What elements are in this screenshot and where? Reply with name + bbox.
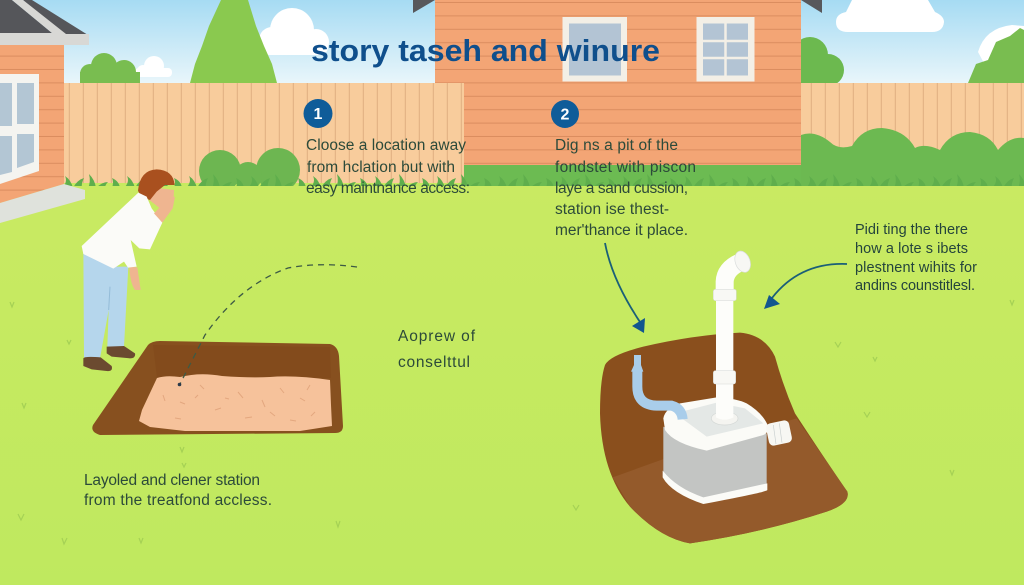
house wall bbox=[435, 0, 801, 166]
window: right bbox=[696, 17, 754, 82]
face bbox=[147, 187, 174, 208]
sand bbox=[139, 374, 332, 431]
pit back wall shading bbox=[153, 345, 331, 378]
side note text: andins counstitlesl. bbox=[855, 278, 975, 294]
pit caption text: from the treatfond accless. bbox=[84, 492, 272, 509]
pit: left with sand bbox=[92, 341, 343, 435]
step 1 text: easy maintnance access: bbox=[306, 180, 470, 197]
step 2 badge: 2 bbox=[561, 106, 570, 124]
person bbox=[82, 169, 175, 371]
center note text bbox=[398, 328, 476, 371]
hand at side bbox=[129, 267, 141, 290]
step 1 badge bbox=[304, 99, 332, 128]
foundation bbox=[0, 184, 85, 223]
pit caption text: Layoled and clener station bbox=[84, 472, 260, 489]
step 2 text bbox=[555, 137, 696, 239]
arrow: to station bbox=[764, 264, 847, 309]
step 2 text: Dig ns a pit of the bbox=[555, 137, 678, 154]
step 2 badge bbox=[551, 100, 579, 128]
house wall bbox=[0, 45, 64, 203]
hand on face bbox=[154, 197, 175, 223]
bushes: right fence bbox=[801, 128, 1024, 186]
shirt bbox=[82, 193, 162, 269]
dashed path to pit bbox=[180, 265, 357, 384]
heading: story taseh and winure bbox=[311, 33, 660, 68]
shrub: right of big house bbox=[792, 37, 844, 86]
legs bbox=[83, 248, 128, 358]
step 1 text: Cloose a location away bbox=[306, 137, 466, 154]
step 2 text: laye a sand cussion, bbox=[555, 180, 688, 197]
excavation bbox=[600, 333, 848, 543]
center note text: Aoprew of bbox=[398, 328, 476, 345]
fence: right bbox=[801, 83, 1024, 183]
pit hole bbox=[92, 341, 343, 435]
center note text: conselttul bbox=[398, 354, 470, 371]
side note text bbox=[855, 222, 977, 294]
window: left bbox=[562, 17, 627, 82]
hedge strip below big house bbox=[464, 165, 801, 187]
arrow: to pit bbox=[605, 243, 645, 333]
side note text: how a lote s ibets bbox=[855, 241, 968, 257]
hair bbox=[138, 169, 175, 200]
tank body bbox=[663, 427, 767, 503]
tank lid bbox=[663, 397, 768, 451]
roof bbox=[0, 0, 88, 35]
big house bbox=[413, 0, 822, 166]
step 1 badge: 1 bbox=[314, 106, 323, 123]
step 2 text: mer'thance it place. bbox=[555, 222, 688, 239]
station in excavated pit bbox=[600, 249, 848, 543]
step 2 text: fondstet with piscon bbox=[555, 159, 696, 176]
side outlet pipe bbox=[765, 419, 793, 447]
conifer tree bbox=[190, 0, 277, 83]
window bbox=[0, 74, 39, 184]
grass blades along lawn edge bbox=[64, 172, 1024, 187]
shoes bbox=[83, 346, 135, 371]
fence: left bbox=[64, 83, 464, 183]
roof corners bbox=[413, 0, 822, 13]
lawn bbox=[0, 186, 1024, 585]
tree: far right bbox=[968, 28, 1024, 85]
cloud: small left bbox=[135, 56, 172, 77]
side note text: Pidi ting the there bbox=[855, 222, 968, 238]
excavation floor bbox=[613, 418, 848, 543]
inlet flow arrow bbox=[631, 355, 683, 419]
tank base rim bbox=[663, 471, 767, 504]
step 1 text bbox=[306, 137, 470, 197]
cloud: behind conifer bbox=[259, 8, 329, 55]
side note text: plestnent wihits for bbox=[855, 260, 977, 276]
shrub: left background bbox=[80, 53, 140, 86]
bushes: left fence bbox=[199, 148, 300, 192]
step 2 text: station ise thest- bbox=[555, 201, 669, 218]
sky bbox=[0, 0, 1024, 90]
pit caption text bbox=[84, 472, 272, 509]
cloud: top right bbox=[836, 0, 944, 32]
cloud: far right bbox=[978, 25, 1024, 65]
grass tufts bbox=[10, 300, 1014, 544]
step 1 text: from hclation but with bbox=[307, 159, 455, 176]
sand texture bbox=[163, 385, 315, 421]
vent pipe bbox=[711, 249, 753, 425]
left house bbox=[0, 0, 89, 223]
dashed path end dot bbox=[178, 383, 181, 386]
